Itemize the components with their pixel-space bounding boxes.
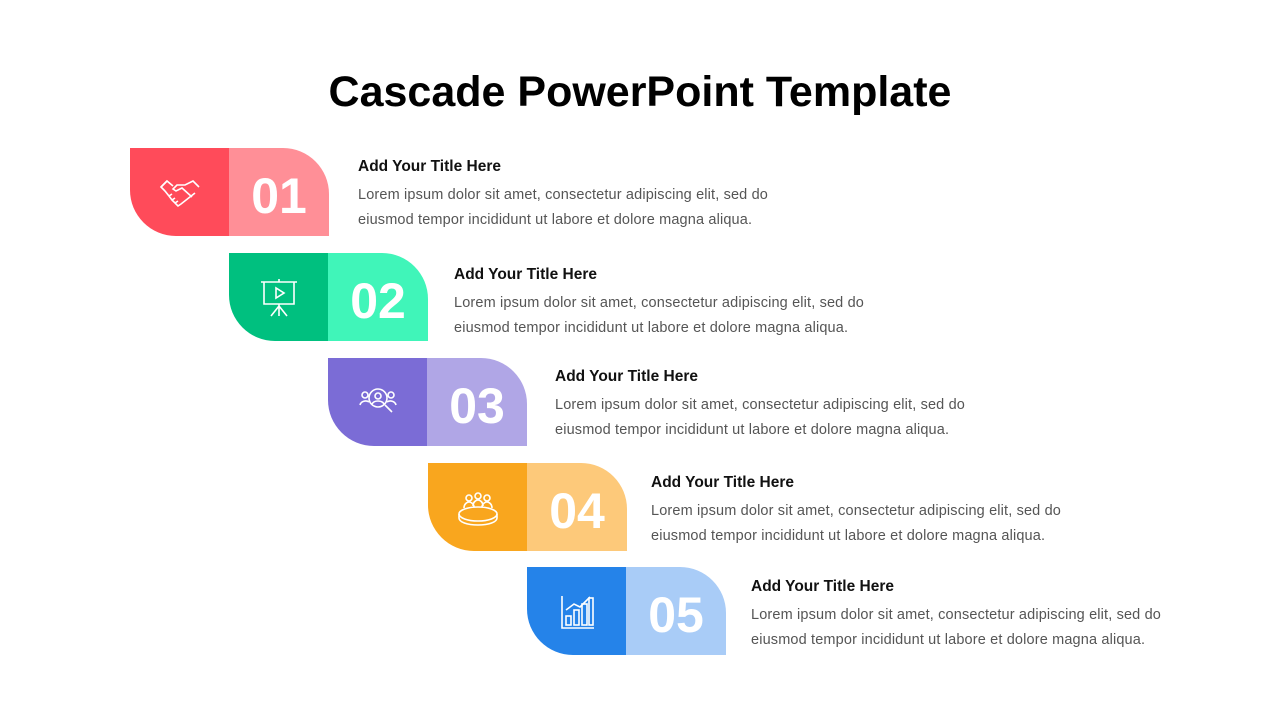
text 1: eiusmod tempor incididunt ut labore et dolore magna aliqua.	[358, 212, 752, 228]
number 01	[229, 148, 329, 236]
icon: team search	[328, 358, 427, 446]
icon: meeting table	[428, 463, 527, 551]
text 4: Lorem ipsum dolor sit amet, consectetur adipiscing elit, sed do	[651, 503, 1061, 519]
text 4: Add Your Title Here	[651, 474, 794, 491]
icon: presentation	[229, 253, 328, 341]
text 1	[358, 158, 768, 228]
number 02	[328, 253, 428, 341]
number 04	[527, 463, 627, 551]
text 2: Lorem ipsum dolor sit amet, consectetur adipiscing elit, sed do	[454, 295, 864, 311]
text 5	[751, 578, 1161, 648]
text 1: Lorem ipsum dolor sit amet, consectetur adipiscing elit, sed do	[358, 187, 768, 203]
number 03	[427, 358, 527, 446]
text 4: eiusmod tempor incididunt ut labore et dolore magna aliqua.	[651, 528, 1045, 544]
step 2 block	[229, 253, 428, 341]
text 3: eiusmod tempor incididunt ut labore et dolore magna aliqua.	[555, 422, 949, 438]
text 2	[454, 266, 864, 336]
number 05	[626, 567, 726, 655]
text 5: eiusmod tempor incididunt ut labore et dolore magna aliqua.	[751, 632, 1145, 648]
text 3: Add Your Title Here	[555, 368, 698, 385]
number 04: 04	[549, 483, 605, 539]
step 1 block	[130, 148, 329, 236]
text 2: eiusmod tempor incididunt ut labore et dolore magna aliqua.	[454, 320, 848, 336]
text 4	[651, 474, 1061, 544]
icon: handshake	[130, 148, 229, 236]
text 5: Lorem ipsum dolor sit amet, consectetur adipiscing elit, sed do	[751, 607, 1161, 623]
step 4 block	[428, 463, 627, 551]
number 02: 02	[350, 273, 406, 329]
number 01: 01	[251, 168, 307, 224]
title: Cascade PowerPoint Template	[329, 68, 951, 116]
icon: bar chart	[527, 567, 626, 655]
number 03: 03	[449, 378, 505, 434]
text 3: Lorem ipsum dolor sit amet, consectetur adipiscing elit, sed do	[555, 397, 965, 413]
text 3	[555, 368, 965, 438]
text 1: Add Your Title Here	[358, 158, 501, 175]
step 5 block	[527, 567, 726, 655]
text 2: Add Your Title Here	[454, 266, 597, 283]
step 3 block	[328, 358, 527, 446]
text 5: Add Your Title Here	[751, 578, 894, 595]
number 05: 05	[648, 587, 704, 643]
